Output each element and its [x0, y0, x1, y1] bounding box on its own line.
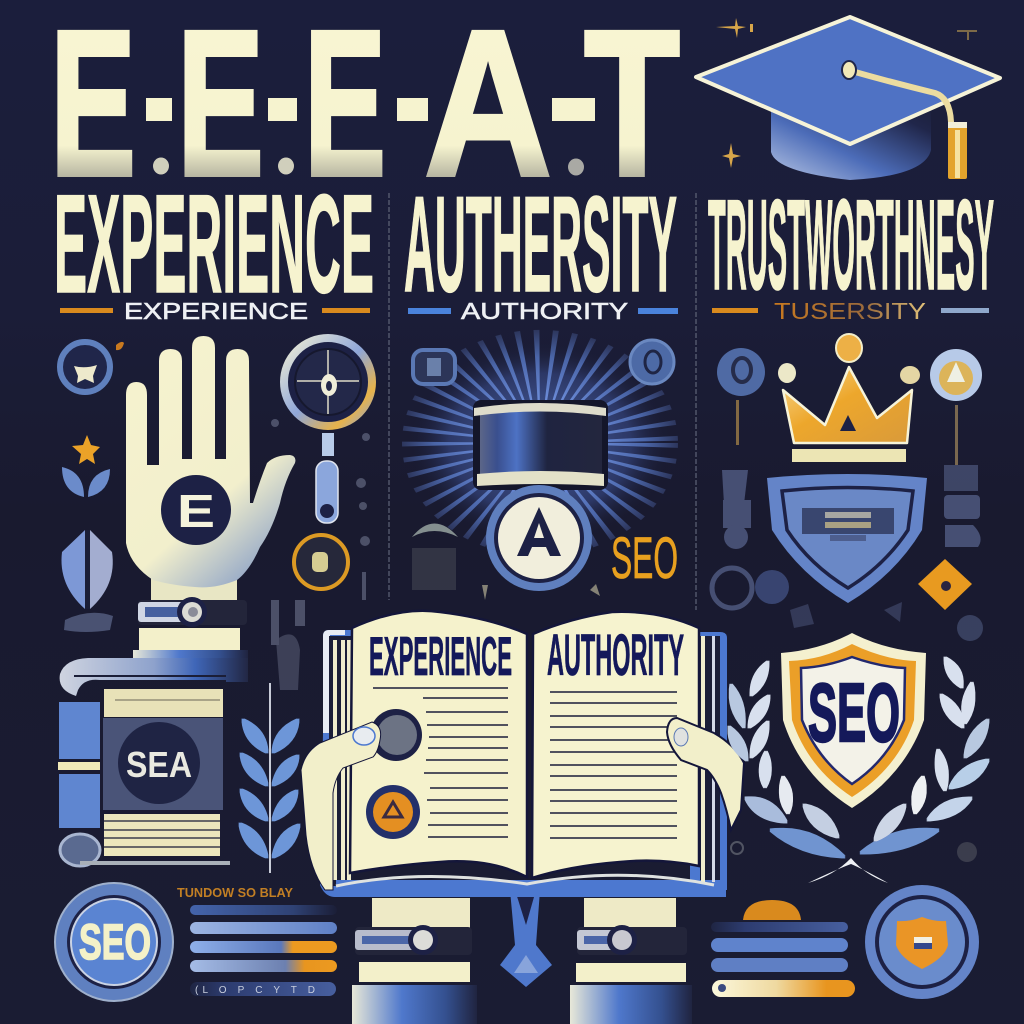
icon: star badge: [60, 342, 124, 392]
bar list: right: [711, 900, 855, 997]
icon: graduation cap: [696, 17, 1000, 180]
sub-labels: TUSERSITY: [774, 298, 926, 324]
icon: orange badge medal: [865, 885, 979, 999]
faint icon clutter: [712, 400, 983, 862]
shield: [781, 633, 926, 808]
column headings: EXPERIENCE: [54, 165, 374, 322]
icon: leaves: [62, 467, 110, 497]
bar list: left: [177, 885, 337, 996]
shield text: SEO: [808, 666, 900, 759]
sub-labels: EXPERIENCE: [124, 298, 308, 324]
book top curl and sleeve: [133, 650, 248, 680]
thumb coin: [370, 709, 422, 761]
panel: trustworthiness: [712, 334, 983, 862]
page stacks: [333, 636, 715, 882]
panel: experience: [60, 336, 372, 690]
orange seal: [366, 785, 420, 839]
bookmark pendant: [500, 890, 552, 987]
icon: side shield: [61, 530, 113, 632]
right page lines: [550, 692, 677, 838]
sub-labels: AUTHORITY: [461, 298, 628, 324]
icon: small badges: [413, 340, 674, 384]
icon: SEO medal: SEO: [79, 914, 151, 970]
title: [50, 0, 680, 220]
faint icon clutter: [271, 419, 370, 690]
bar list: left: TUNDOW SO BLAY: [177, 885, 293, 900]
bar list: left: (L O P C Y T D: [195, 985, 315, 996]
panel: authority: [410, 340, 678, 600]
left forearm: [352, 898, 477, 1024]
book stack icon: SEA: [126, 744, 192, 785]
icon: orange star: [72, 435, 100, 464]
book stack icon: [58, 650, 248, 866]
icon: side badges: [717, 348, 982, 401]
open book held by hands: [301, 611, 744, 987]
left page lines: [373, 688, 508, 837]
sub-labels: [60, 298, 989, 324]
radiating rays: [410, 343, 670, 543]
icon: orange diamond: [918, 559, 972, 610]
icon: top hat: [473, 400, 608, 490]
right hand: [667, 718, 744, 830]
left hand: [301, 722, 381, 890]
right page: [532, 612, 699, 878]
faint eye icons: [412, 524, 600, 600]
icon: SEO medal: [55, 883, 173, 1001]
book bottom edge: [336, 875, 714, 886]
icon: blue shield: [767, 474, 927, 603]
icon: crown: [778, 334, 920, 462]
book cover: [320, 630, 727, 897]
laurel: [729, 658, 988, 857]
wrist band: [138, 597, 247, 650]
SEO label: SEO: [611, 526, 678, 591]
column dividers: [389, 193, 696, 610]
icon: gold ring: [294, 535, 348, 589]
open book held by hands: EXPERIENCE: [369, 625, 512, 687]
sparkles near cap: [716, 18, 977, 168]
right forearm: [570, 898, 692, 1024]
icon: A medal: [486, 485, 592, 591]
icon: hand with E: E: [177, 485, 215, 537]
icon: plant sprig: [240, 683, 299, 873]
left page: [350, 611, 527, 877]
icon: hand with E: [126, 336, 295, 602]
icon: magnifier: [284, 338, 372, 523]
open book held by hands: AUTHORITY: [547, 623, 684, 688]
icon: SEO shield with laurel: [729, 633, 988, 883]
